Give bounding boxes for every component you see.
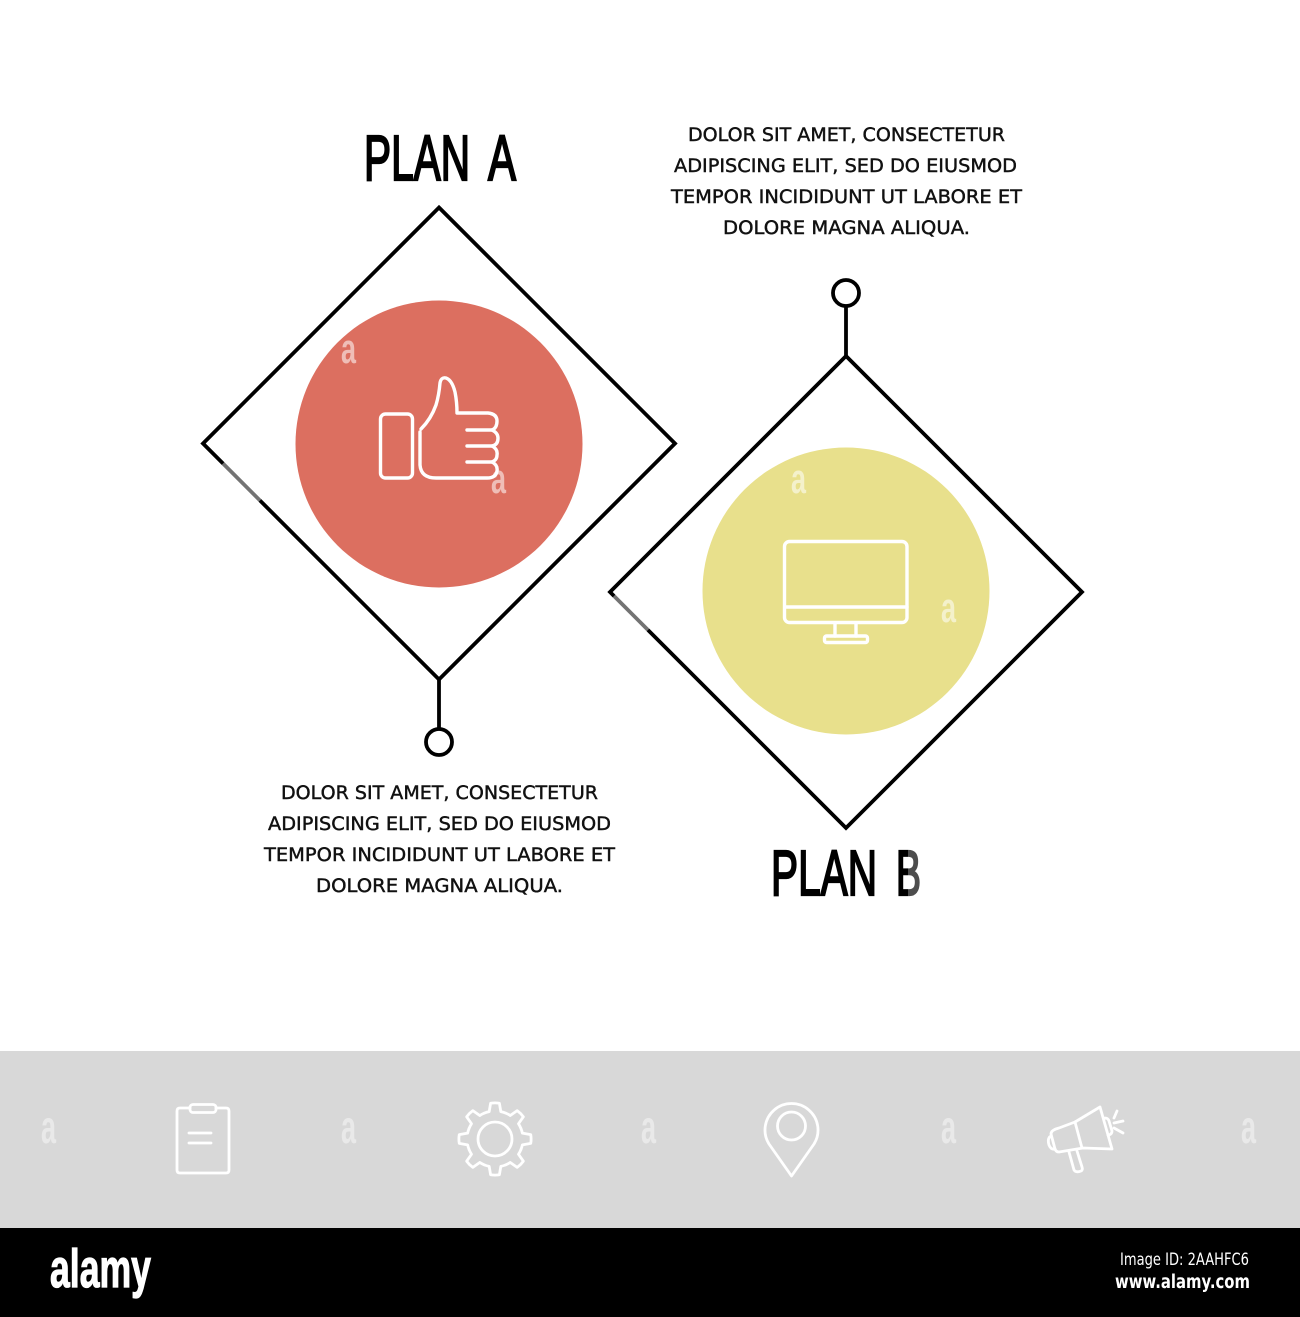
text block B [670, 124, 1022, 239]
watermarks on band: a [1241, 1101, 1256, 1153]
yellow circle [702, 448, 990, 734]
watermarks on band [41, 1101, 1256, 1153]
text block A [263, 782, 615, 897]
logo: alamy: alamy [50, 1239, 151, 1299]
panel: grey icon band [0, 1051, 1300, 1228]
text block A: DOLORE MAGNA ALIQUA. [316, 875, 563, 897]
icon: gear [459, 1103, 531, 1175]
connector stem B [844, 306, 848, 356]
icon: megaphone [1048, 1107, 1123, 1172]
watermarks on circles [341, 325, 956, 631]
icon: monitor [784, 542, 907, 642]
watermarks on band: a [41, 1101, 56, 1153]
watermarks on circles: a [791, 455, 806, 502]
text block B: DOLORE MAGNA ALIQUA. [723, 217, 970, 239]
watermarks on band: a [641, 1101, 656, 1153]
heading: plan B: B [896, 837, 921, 909]
text block B: ADIPISCING ELIT, SED DO EIUSMOD [674, 155, 1017, 177]
red circle [296, 300, 582, 588]
text block A: ADIPISCING ELIT, SED DO EIUSMOD [268, 813, 611, 835]
panel: plan B [610, 124, 1082, 909]
heading: plan A: A [488, 122, 516, 194]
connector node A [426, 729, 452, 755]
footer bar [0, 1228, 1300, 1317]
text block B: TEMPOR INCIDIDUNT UT LABORE ET [670, 186, 1022, 208]
diamond frame B [610, 356, 1082, 828]
connector node B [833, 280, 859, 306]
image id: Image ID: 2AAHFC6 [1120, 1250, 1249, 1269]
text block B: DOLOR SIT AMET, CONSECTETUR [688, 124, 1005, 146]
watermarks on circles: a [341, 325, 356, 372]
watermarks on band: a [341, 1101, 356, 1153]
text block A: DOLOR SIT AMET, CONSECTETUR [281, 782, 598, 804]
diamond frame A [203, 208, 675, 680]
watermarks on band: a [941, 1101, 956, 1153]
heading: plan B: PLAN [771, 837, 877, 909]
watermarks on circles: a [941, 584, 956, 631]
icon: clipboard [177, 1104, 229, 1173]
connector stem A [437, 679, 441, 729]
panel: plan A [203, 122, 675, 897]
text block A: TEMPOR INCIDIDUNT UT LABORE ET [263, 844, 615, 866]
icon: map pin [765, 1104, 818, 1176]
heading: plan A: PLAN [364, 122, 470, 194]
icon: thumbs up [380, 378, 498, 478]
watermarks on circles: a [491, 455, 506, 502]
website: www.alamy.com [1115, 1272, 1250, 1293]
